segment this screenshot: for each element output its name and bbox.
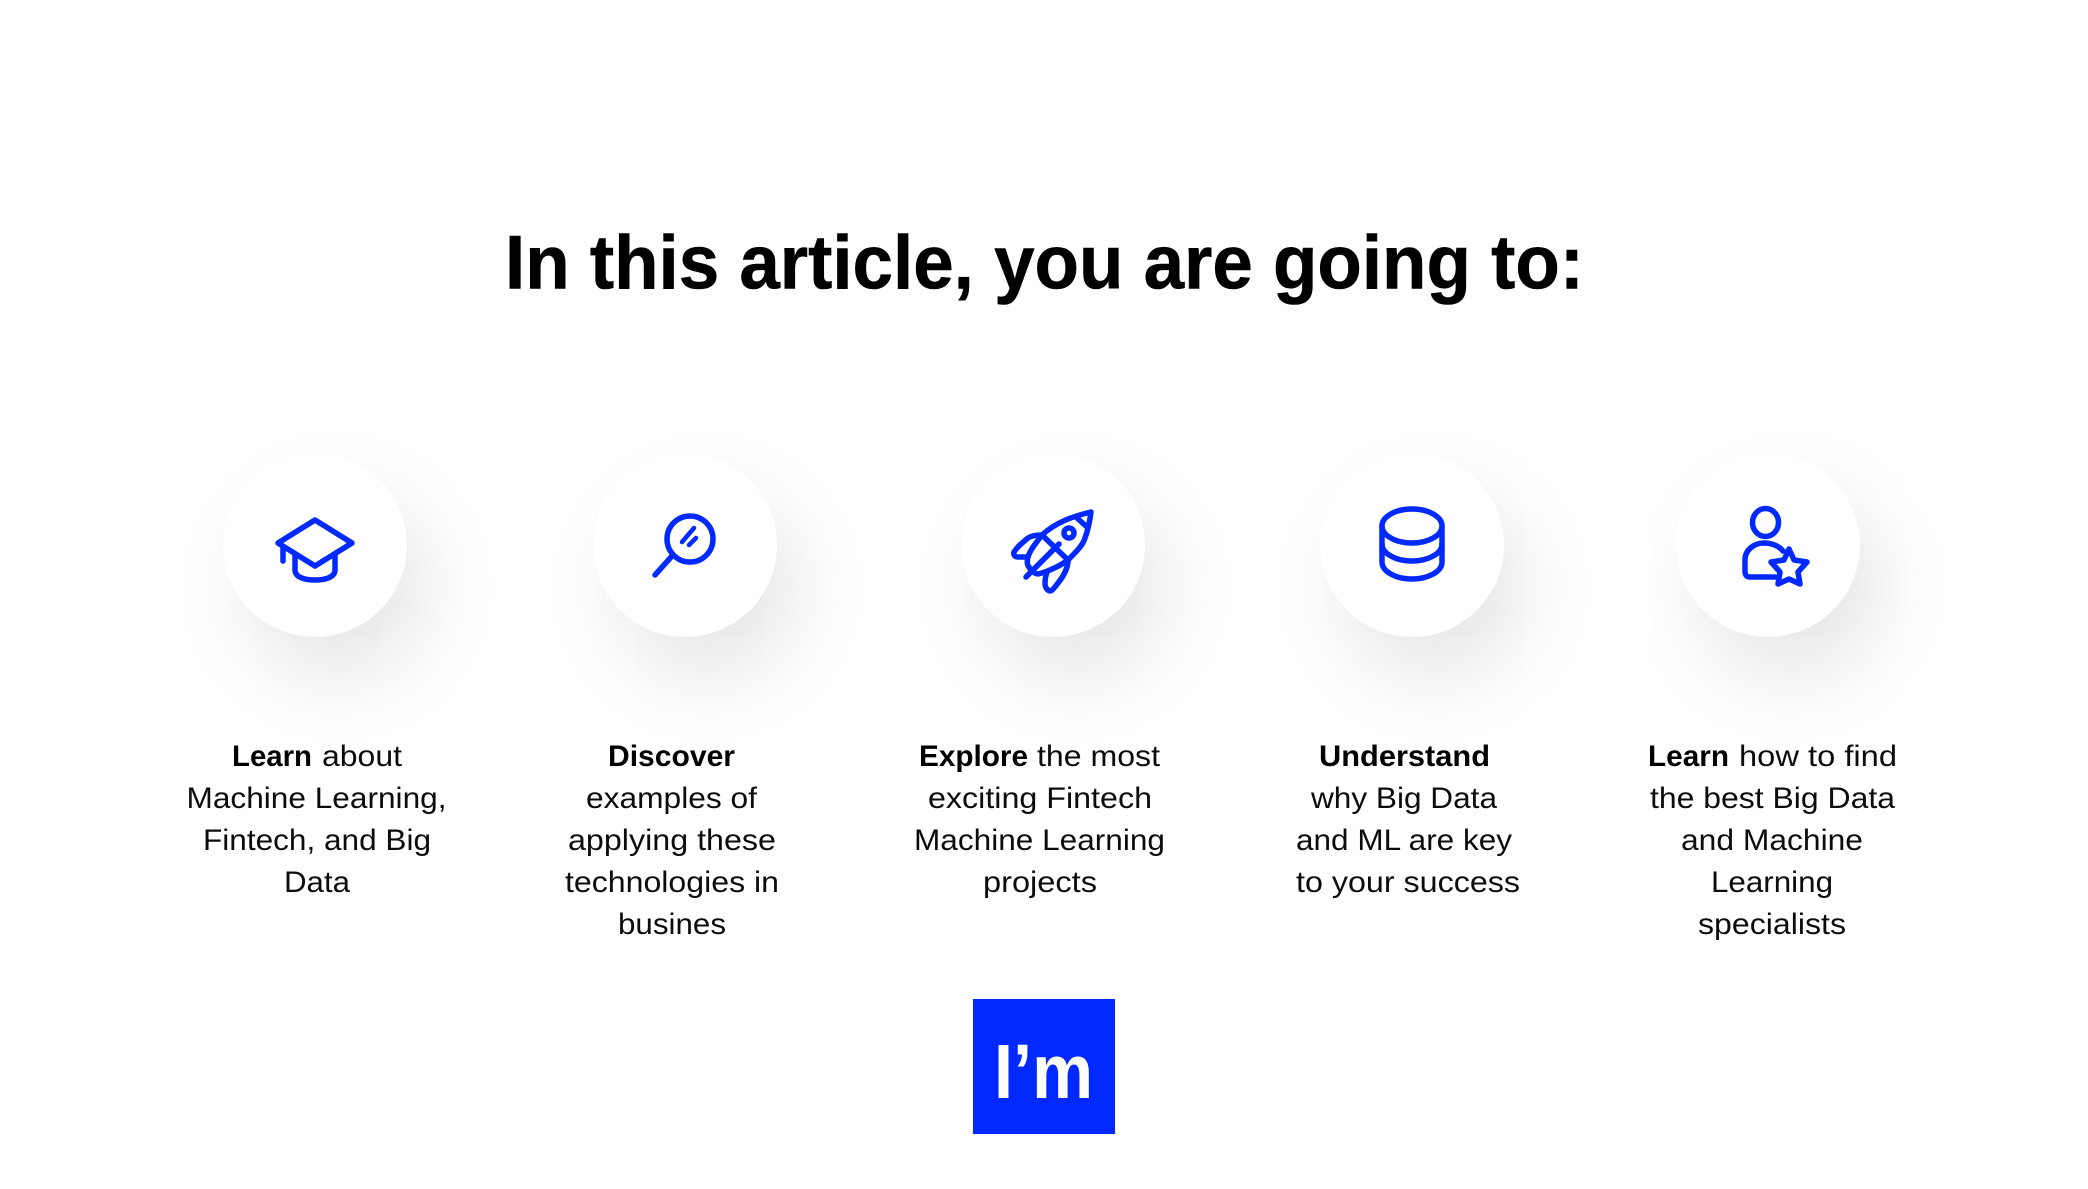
icon: person with star — [1745, 508, 1807, 584]
panel: learn to find specialists — [1648, 506, 1897, 941]
text: understand — [1296, 740, 1520, 899]
text: discover: examples of — [586, 782, 758, 815]
text: learn about — [186, 740, 446, 899]
text: learn how to find: Learn — [1648, 740, 1729, 773]
text: understand: Understand — [1319, 740, 1490, 773]
logo: I’m — [994, 1029, 1093, 1115]
panel: discover examples — [565, 513, 807, 941]
text: learn how to find: specialists — [1698, 908, 1846, 941]
text: explore: projects — [983, 866, 1097, 899]
circle: specialist badge — [1676, 453, 1860, 637]
text: learn how to find: Learning — [1711, 866, 1833, 899]
text: discover: Discover — [608, 740, 735, 773]
icon: magnifying glass — [655, 516, 713, 575]
text: discover: technologies in — [565, 866, 779, 899]
text: learn how to find: how to find — [1739, 740, 1897, 773]
circle: graduation cap badge — [223, 453, 407, 637]
text: understand: to your success — [1296, 866, 1520, 899]
icon: database — [1382, 509, 1442, 579]
text: learn about: Learn — [232, 740, 312, 773]
text: explore: Machine Learning — [914, 824, 1165, 857]
logo — [973, 999, 1115, 1134]
text: learn about: about — [322, 740, 403, 773]
text: learn about: Data — [284, 866, 350, 899]
icon: rocket — [1014, 512, 1091, 591]
text: understand: and ML are key — [1296, 824, 1512, 857]
panel: learn about ML — [186, 512, 446, 899]
text: discover: busines — [618, 908, 726, 941]
title: In this article, you are going to: — [505, 220, 1584, 306]
text: learn how to find: the best Big Data — [1650, 782, 1895, 815]
text: learn about: Fintech, and Big — [203, 824, 431, 857]
text: discover: applying these — [568, 824, 776, 857]
text: learn about: Machine Learning, — [186, 782, 446, 815]
circle: rocket badge — [961, 453, 1145, 637]
text: discover — [565, 740, 779, 941]
circle: magnifier badge — [593, 453, 777, 637]
panel: understand big data — [1296, 506, 1531, 899]
text: explore — [914, 740, 1165, 899]
circle: database badge — [1320, 453, 1504, 637]
text: learn how to find: and Machine — [1681, 824, 1863, 857]
text: explore: the most — [1037, 740, 1161, 773]
icon: graduation cap — [278, 520, 352, 580]
text: explore: Explore — [919, 740, 1028, 773]
text: explore: exciting Fintech — [928, 782, 1152, 815]
panel: explore projects — [914, 509, 1175, 899]
text: learn how to find — [1648, 740, 1897, 941]
text: understand: why Big Data — [1310, 782, 1497, 815]
